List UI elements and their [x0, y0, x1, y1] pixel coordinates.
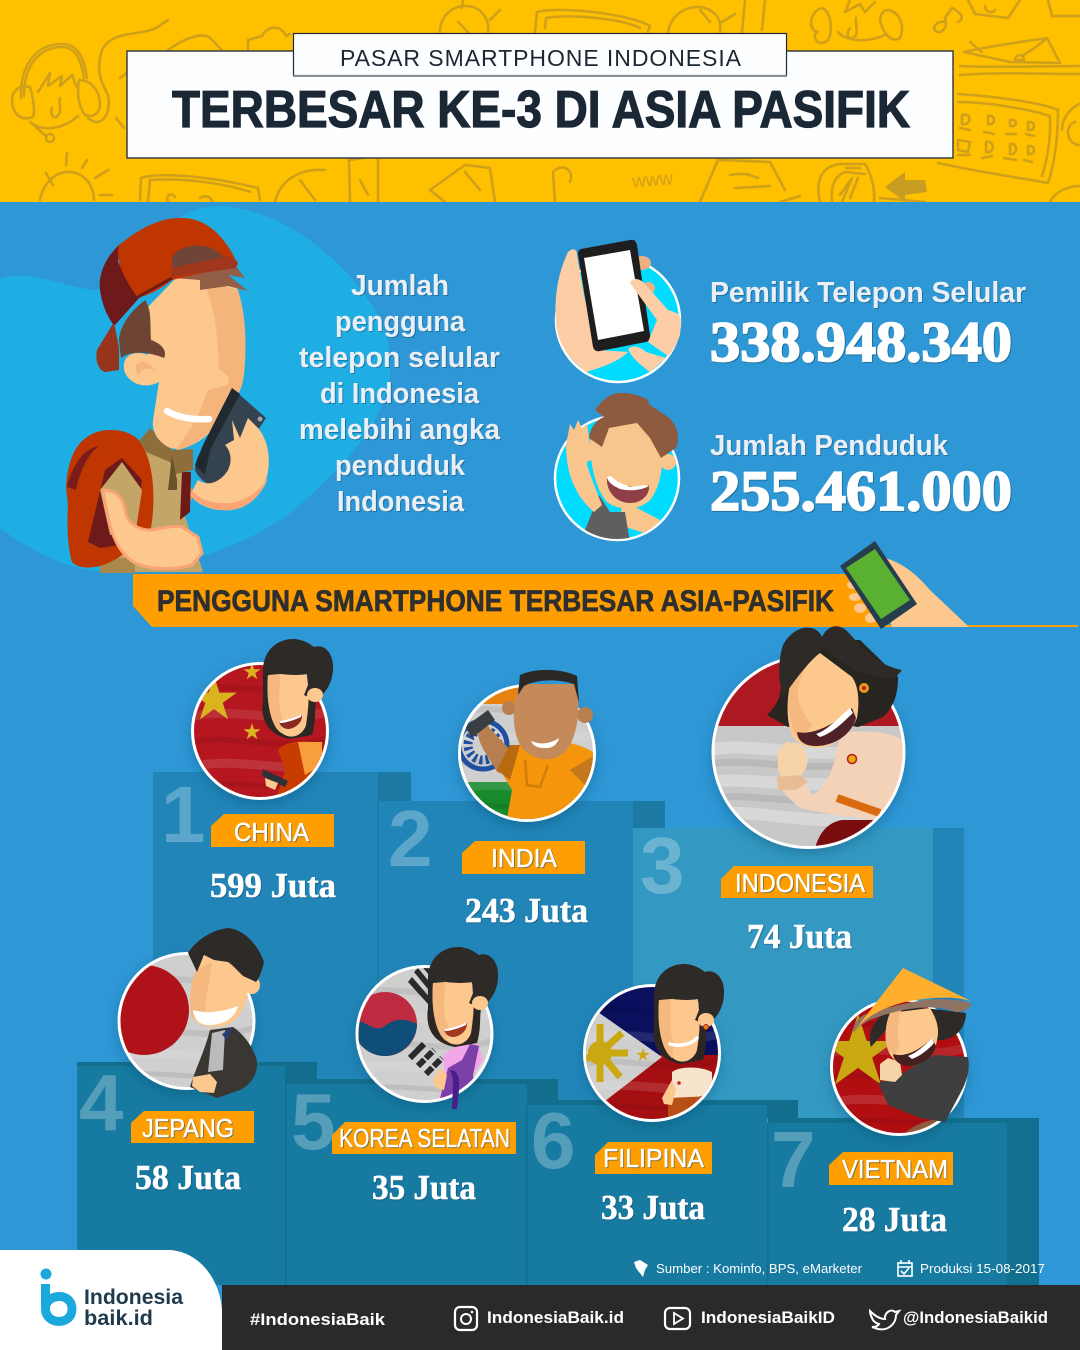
youtube: IndonesiaBaikID — [701, 1308, 835, 1327]
hashtag: #IndonesiaBaik — [250, 1310, 386, 1329]
logo text: baik.id — [84, 1307, 153, 1330]
rank 4: 4 — [79, 1058, 124, 1147]
filipina circle — [578, 964, 724, 1125]
china label: CHINA — [234, 817, 310, 847]
back fingers — [633, 256, 651, 270]
phone body — [578, 240, 650, 351]
statement text: melebihi angka — [299, 414, 501, 446]
banner: largest smartphone users: PENGGUNA SMARTPHONE TERBESAR ASIA-PASIFIK — [157, 585, 834, 618]
header doodle pattern: www — [630, 168, 674, 193]
light blue blob — [0, 206, 391, 572]
indonesia woman head — [767, 626, 902, 790]
korea label: KOREA SELATAN — [339, 1123, 510, 1153]
rank 2: 2 — [388, 794, 432, 883]
korea circle — [353, 947, 498, 1110]
china value: 599 Juta — [210, 866, 336, 905]
statement text: penduduk — [335, 450, 466, 482]
head — [590, 420, 662, 509]
subtitle box — [293, 34, 787, 77]
statement text: Jumlah — [351, 270, 449, 302]
vietnam person — [853, 968, 971, 1122]
side hair — [119, 300, 165, 358]
japan circle — [99, 928, 264, 1098]
smile — [167, 411, 209, 419]
statement text: di Indonesia — [320, 378, 480, 410]
phone — [195, 388, 266, 488]
stat: population: Jumlah Penduduk — [710, 430, 949, 462]
podium back row — [153, 772, 964, 1285]
vietnam circle — [821, 968, 971, 1140]
phone screen — [584, 250, 644, 340]
title panel — [127, 34, 953, 158]
fist — [778, 742, 808, 778]
raised arm — [566, 420, 602, 512]
japan man — [188, 928, 264, 1098]
rank 7: 7 — [771, 1115, 816, 1204]
character: man with backpack on phone — [66, 218, 269, 573]
ears — [579, 443, 597, 461]
india circle — [457, 670, 605, 830]
logo panel — [0, 1250, 222, 1350]
korea ribbon — [450, 1070, 459, 1109]
collar — [140, 428, 193, 474]
yellow header background — [0, 0, 1080, 202]
arm across — [621, 508, 660, 533]
stat: phone owners: Pemilik Telepon Selular — [710, 277, 1026, 309]
china label — [211, 814, 334, 847]
icon: pin — [634, 1260, 648, 1277]
mouth — [607, 478, 649, 503]
rank 3: 3 — [640, 821, 684, 910]
indonesia circle — [710, 626, 910, 851]
face — [124, 273, 245, 449]
title text: TERBESAR KE-3 DI ASIA PASIFIK — [172, 81, 910, 139]
icon: hands holding phone — [555, 240, 681, 382]
india label — [462, 841, 585, 874]
india value: 243 Juta — [465, 891, 588, 930]
podium front row — [77, 1062, 1039, 1285]
filipina value: 33 Juta — [601, 1188, 705, 1227]
cap underline — [114, 278, 172, 324]
tank top — [585, 495, 630, 539]
footer bar — [222, 1285, 1080, 1350]
japan value: 58 Juta — [135, 1158, 241, 1197]
statement text: Indonesia — [337, 486, 465, 518]
statement text: pengguna — [335, 306, 466, 338]
stat: population — [710, 430, 1012, 523]
indonesia value: 74 Juta — [747, 917, 852, 956]
subtitle box: PASAR SMARTPHONE INDONESIA — [340, 45, 742, 71]
korea value: 35 Juta — [372, 1168, 476, 1207]
china circle — [190, 639, 333, 802]
left hand — [555, 249, 628, 372]
logo text — [84, 1286, 183, 1330]
rank 6: 6 — [531, 1096, 576, 1185]
rank 1: 1 — [161, 770, 206, 859]
ear detail — [135, 362, 156, 376]
banner: largest smartphone users — [133, 574, 1078, 627]
statement text: telepon selular — [299, 342, 500, 374]
stat: phone owners: 338.948.340 — [710, 311, 1012, 374]
filipina label: FILIPINA — [603, 1143, 705, 1173]
instagram: IndonesiaBaik.id — [487, 1308, 624, 1327]
cap — [96, 322, 119, 372]
twitter: @IndonesiaBaikid — [903, 1308, 1048, 1327]
hair — [589, 393, 678, 458]
icon: hand holding green phone — [840, 541, 969, 629]
vietnam label: VIETNAM — [842, 1154, 948, 1184]
india man head — [502, 670, 593, 759]
shirt body — [100, 445, 203, 572]
arm down — [103, 490, 202, 569]
source note: Sumber : Kominfo, BPS, eMarketer — [656, 1261, 863, 1276]
stat: phone owners — [710, 277, 1026, 374]
right hand — [630, 279, 681, 356]
stat: population: 255.461.000 — [710, 460, 1012, 523]
title box — [127, 51, 953, 158]
japan label: JEPANG — [142, 1113, 234, 1143]
indonesia label: INDONESIA — [735, 868, 866, 898]
hand — [190, 418, 269, 510]
backpack — [66, 430, 153, 568]
rank 5: 5 — [291, 1077, 336, 1166]
india label: INDIA — [491, 843, 558, 873]
instagram — [455, 1307, 624, 1330]
icon: calendar — [898, 1260, 912, 1276]
statement text — [299, 270, 501, 518]
logo text: Indonesia — [84, 1286, 183, 1309]
production date: Produksi 15-08-2017 — [920, 1261, 1045, 1276]
logo icon — [40, 1268, 72, 1321]
icon: shouting man — [555, 393, 679, 545]
fringe — [174, 262, 248, 291]
vietnam value: 28 Juta — [842, 1200, 947, 1239]
header doodle pattern — [12, 0, 1080, 202]
